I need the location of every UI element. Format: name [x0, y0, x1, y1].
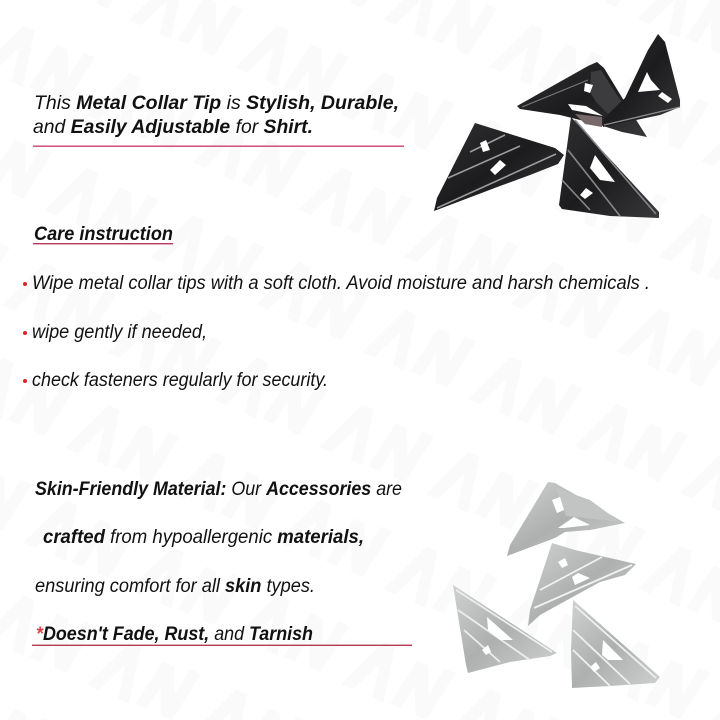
text block: skin-friendly material: crafted from hypoallergenic materials, — [43, 526, 364, 548]
photo: black metal collar tips — [434, 34, 680, 218]
callout: doesn't fade, rust, tarnish: *Doesn't Fade, Rust, and Tarnish — [36, 623, 313, 645]
collar tip: black, upper middle — [517, 62, 647, 137]
collar tip: black, lower left — [434, 123, 564, 211]
text block: skin-friendly material — [35, 478, 402, 597]
collar tip: silver, lower right — [571, 600, 660, 688]
collar tip: silver, lower left — [453, 585, 557, 673]
heading: product statement: This Metal Collar Tip is Stylish, Durable, — [34, 93, 399, 114]
heading: care instruction: Care instruction — [34, 224, 173, 245]
collar tip: black, lower right — [559, 117, 659, 218]
collar tip: silver, top — [507, 482, 625, 556]
text block: skin-friendly material: ensuring comfort for all skin types. — [35, 575, 315, 597]
text block: skin-friendly material: Skin-Friendly Material: Our Accessories are — [35, 478, 402, 500]
bullet: check fasteners: check fasteners regularly for security. — [32, 370, 328, 391]
bullet: wipe gently: wipe gently if needed, — [32, 322, 207, 343]
collar tip: black, upper right — [603, 34, 680, 127]
collar tip: silver, middle — [528, 543, 636, 626]
heading: product statement — [33, 93, 404, 147]
bullet: wipe with soft cloth: Wipe metal collar tips with a soft cloth. Avoid moisture and harsh chemicals . — [32, 273, 650, 294]
photo: silver metal collar tips — [453, 482, 660, 688]
care instruction list — [23, 273, 650, 391]
heading: product statement: and Easily Adjustable for Shirt. — [33, 117, 313, 138]
